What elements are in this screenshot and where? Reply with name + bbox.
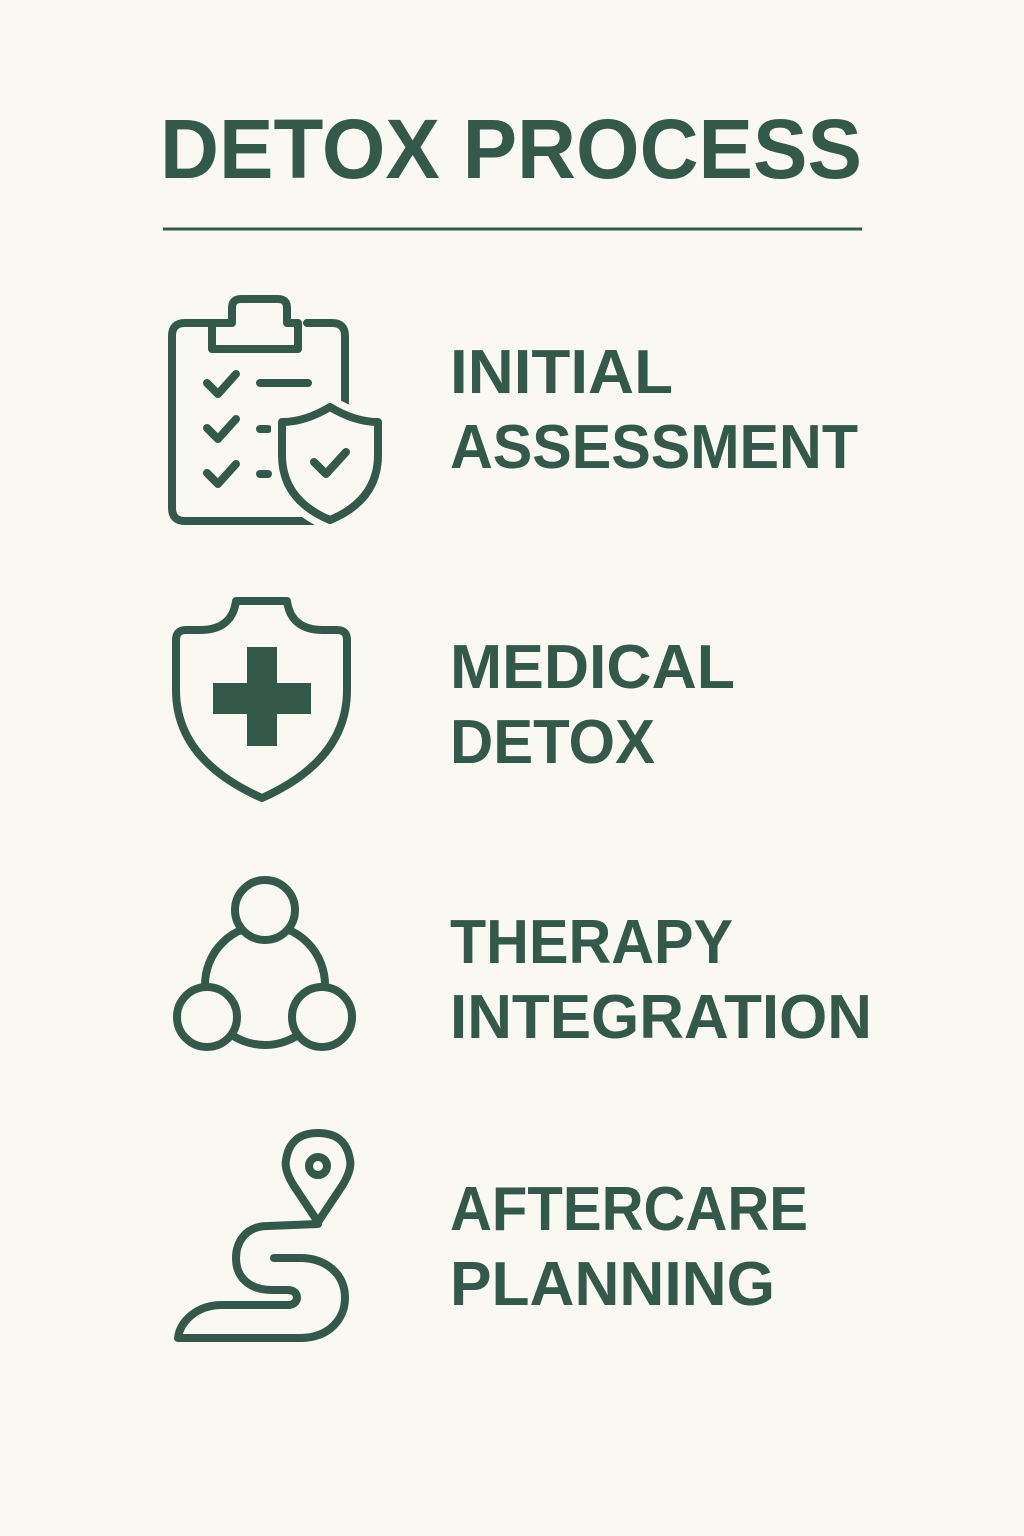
label: aftercare planning: PLANNING [450,1250,775,1319]
label: medical detox [450,633,735,777]
icon: shield with cross [176,601,347,798]
label: therapy integration: THERAPY [450,908,733,977]
label: therapy integration: INTEGRATION [450,983,872,1052]
label: medical detox: DETOX [450,708,655,777]
label: aftercare planning: AFTERCARE [450,1175,808,1244]
label: medical detox: MEDICAL [450,633,735,702]
label: initial assessment: INITIAL [450,338,673,407]
label: initial assessment: ASSESSMENT [450,413,858,482]
icon: clipboard with shield [172,299,378,521]
title: DETOX PROCESS [160,102,862,196]
icon: connected circles [177,880,352,1047]
label: aftercare planning [450,1175,808,1319]
icon: map pin with winding road [178,1133,350,1338]
label: initial assessment [450,338,858,482]
label: therapy integration [450,908,872,1052]
